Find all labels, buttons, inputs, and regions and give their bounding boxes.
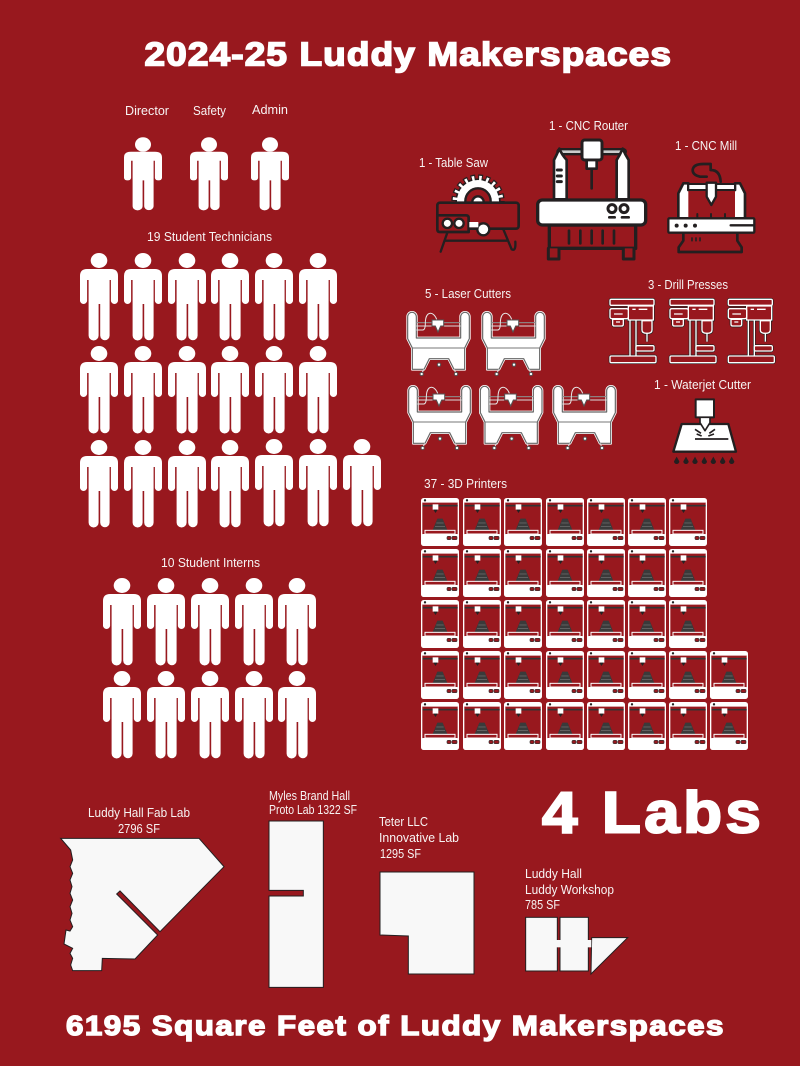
title: 2024-25 Luddy Makerspaces [144,36,671,73]
label: CNC router: 1 - CNC Router [549,119,628,133]
icons: 3 drill presses [610,299,774,363]
panel: waterjet cutter [654,378,751,464]
heading: 1 Waterjet Cutter: 1 - Waterjet Cutter [654,378,751,392]
label: Fab Lab name and area [88,806,190,836]
icons: 10 intern figures [103,578,316,758]
icons: 19 technician figures [80,253,381,527]
label: Innovative Lab name and area: Innovative Lab [379,831,459,845]
panel: drill presses [610,278,774,363]
label: Innovative Lab name and area: Teter LLC [379,815,428,829]
icons: three staff figures [124,137,289,210]
panel: student interns [103,556,316,758]
label: Proto Lab name and area: Myles Brand Hall [269,789,350,803]
label: Innovative Lab name and area: 1295 SF [380,847,421,861]
callout: 4 Labs: 4 Labs [542,780,761,845]
icons: 5 laser cutters [408,312,615,450]
heading: 10 Student Interns: 10 Student Interns [161,556,260,570]
label: Admin: Admin [252,103,288,117]
floor plan: Innovative Lab [380,872,474,974]
label: Workshop name and area: Luddy Hall [525,867,582,881]
heading: 5 Laser Cutters: 5 - Laser Cutters [425,287,511,301]
heading: 19 Student Technicians: 19 Student Technicians [147,230,272,244]
label: table saw: 1 - Table Saw [419,156,489,170]
heading: 3 Drill Presses: 3 - Drill Presses [648,278,728,292]
panel: Luddy Hall Fab Lab [61,806,224,971]
label: Proto Lab name and area: Proto Lab 1322 SF [269,803,357,817]
label: Proto Lab name and area [269,789,357,817]
panel: 3D printers [422,477,747,749]
label: Fab Lab name and area: Luddy Hall Fab Lab [88,806,190,820]
icon: waterjet cutter [673,399,736,464]
panel: Teter LLC Innovative Lab [379,815,474,974]
floor plan: Fab Lab [61,838,224,971]
label: CNC mill: 1 - CNC Mill [675,139,737,153]
icon: table saw [437,177,519,252]
panel: Myles Brand Hall Proto Lab [269,789,357,987]
label: Director: Director [125,104,169,118]
heading: 37 3D Printers: 37 - 3D Printers [424,477,507,491]
floor plan: Proto Lab [269,821,323,987]
label: Fab Lab name and area: 2796 SF [118,822,160,836]
icons: 37 3D printers [422,499,747,749]
icon: CNC mill [668,164,754,252]
panel: leadership staff [124,103,289,210]
panel: Luddy Hall Luddy Workshop [525,867,628,974]
label: Innovative Lab name and area [379,815,459,861]
footer total: 6195 Square Feet of Luddy Makerspaces [66,1011,723,1042]
label: Workshop name and area: 785 SF [525,898,560,912]
floor plan: Workshop [526,917,628,974]
icon: CNC router [538,140,646,259]
label: Workshop name and area: Luddy Workshop [525,883,614,897]
label: Workshop name and area [525,867,614,912]
panel: laser cutters [408,287,615,450]
panel: student technicians [80,230,381,527]
label: Safety: Safety [193,104,227,118]
